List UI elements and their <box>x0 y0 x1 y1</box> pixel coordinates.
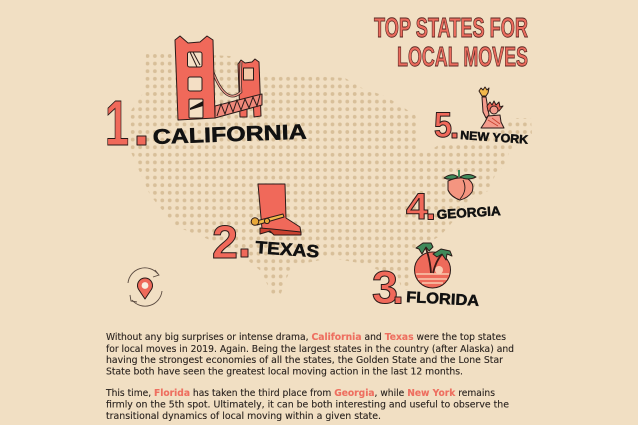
text block: first paragraph: Without any big surprises or intense drama, California and Texas were the top states <box>106 332 506 343</box>
text block: second paragraph: firmly on the 5th spot. Ultimately, it can be both interesting and useful to observe the <box>106 400 509 410</box>
title: TOP STATES FOR <box>374 12 528 43</box>
deck <box>215 94 262 118</box>
label: Florida: FLORIDA <box>406 289 480 310</box>
number 1: 1 <box>105 87 129 159</box>
dotted map of the United States <box>130 52 532 296</box>
text block: second paragraph: This time, Florida has taken the third place from Georgia, while New York remains <box>105 388 495 399</box>
text block: first paragraph: for local moves in 2019. Again. Being the largest states in the country (after Alaska) and <box>106 344 514 355</box>
icon: peach <box>444 170 476 200</box>
title <box>374 12 528 72</box>
front tower <box>175 36 215 120</box>
text block: first paragraph: having the strongest economies of all the states, the Golden State and the Lone Star <box>106 355 503 366</box>
label: Georgia: GEORGIA <box>436 203 502 222</box>
number 3: 3 <box>372 262 398 313</box>
icon: Statue of Liberty <box>479 87 504 128</box>
back tower <box>238 59 261 117</box>
label: California: CALIFORNIA <box>152 121 307 149</box>
number 5: 5 <box>434 106 452 145</box>
text block: first paragraph: State both have seen the greatest local moving action in the last 12 months. <box>106 366 463 378</box>
icon: location pin with circular arrows <box>128 268 162 306</box>
title: LOCAL MOVES <box>397 41 528 72</box>
label: Texas: TEXAS <box>255 237 320 261</box>
number 4: 4 <box>406 186 428 227</box>
cables <box>213 62 241 96</box>
label: New York: NEW YORK <box>460 128 529 147</box>
text block: first paragraph <box>106 332 514 378</box>
number 2: 2 <box>212 216 238 268</box>
icon: cowboy boot <box>251 184 301 235</box>
text block: second paragraph <box>105 388 509 422</box>
icon: Golden Gate bridge <box>175 36 262 120</box>
text block: second paragraph: transitional dynamics of local moving within a given state. <box>106 411 381 422</box>
icon: palm trees and sunset <box>414 243 452 288</box>
